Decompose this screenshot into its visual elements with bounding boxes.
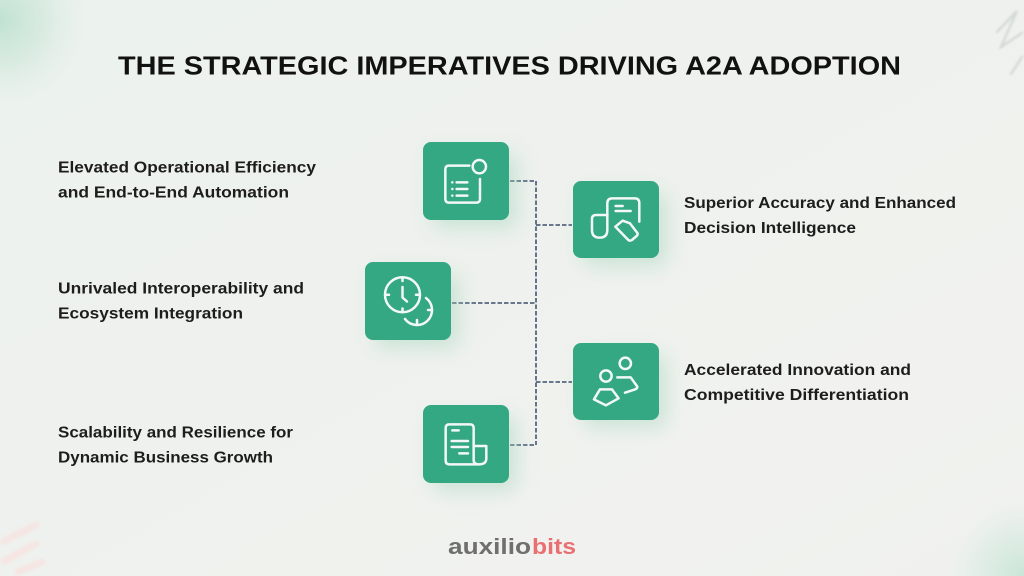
icon card: clocks (365, 262, 459, 348)
icon card: checklist (423, 142, 517, 228)
icon: clocks (385, 277, 432, 325)
icon: checklist (445, 160, 486, 203)
text: accelerated innovation: Accelerated Innovation and (684, 362, 911, 379)
title: THE STRATEGIC IMPERATIVES DRIVING A2A ADOPTION (118, 50, 901, 80)
icon card: people (573, 343, 667, 428)
text: elevated operational efficiency (58, 160, 316, 202)
text: scalability and resilience: Dynamic Business Growth (58, 450, 273, 467)
logo: auxilio (448, 534, 531, 559)
text: accelerated innovation: Competitive Differentiation (684, 387, 909, 404)
text: elevated operational efficiency: Elevated Operational Efficiency (58, 160, 316, 177)
icon card: document and tag (573, 181, 667, 266)
text: accelerated innovation (684, 362, 911, 404)
text: superior accuracy (684, 195, 956, 237)
logo (448, 534, 576, 559)
decoration: pink scribble bottom left (4, 525, 42, 572)
text: elevated operational efficiency: and End-to-End Automation (58, 185, 289, 202)
icon: people (594, 358, 637, 405)
text: unrivaled interoperability: Unrivaled Interoperability and (58, 281, 304, 298)
text: unrivaled interoperability (58, 281, 304, 323)
text: superior accuracy: Superior Accuracy and Enhanced (684, 195, 956, 212)
text: scalability and resilience: Scalability and Resilience for (58, 425, 293, 442)
text: unrivaled interoperability: Ecosystem Integration (58, 306, 243, 323)
dashed connector lines (452, 181, 572, 445)
text: superior accuracy: Decision Intelligence (684, 220, 856, 237)
text: scalability and resilience (58, 425, 293, 467)
logo: bits (532, 534, 576, 559)
icon: scroll document (446, 424, 486, 464)
icon card: scroll document (423, 405, 517, 491)
decoration: grey scribble top right (997, 11, 1022, 74)
icon: document and tag (592, 198, 639, 241)
